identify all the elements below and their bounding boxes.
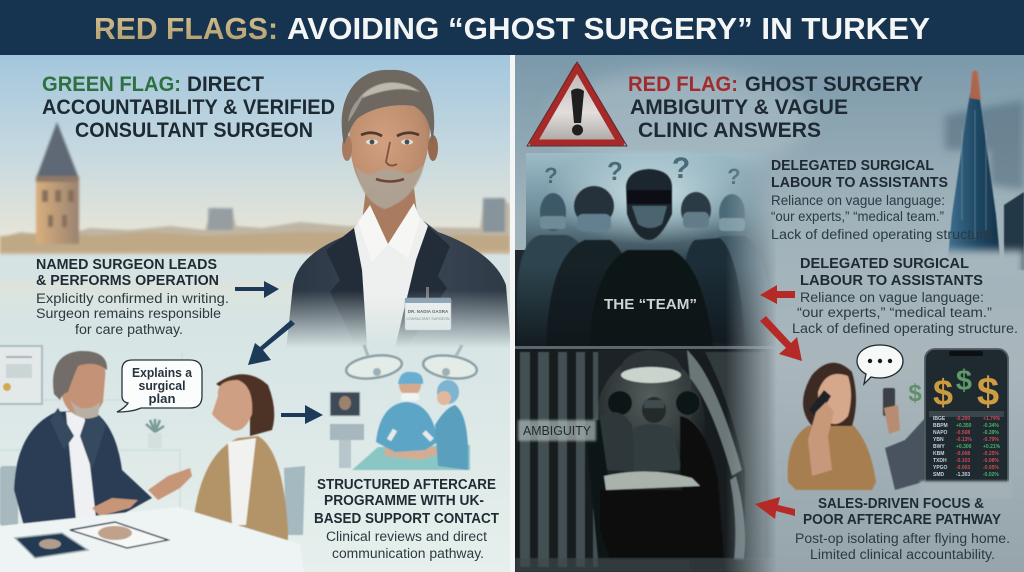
illustration: the team (515, 153, 774, 346)
arrow: to operating theatre (281, 405, 323, 424)
illustration: trading phone: -0.003 (956, 465, 970, 471)
text: delegated labour 1: LABOUR TO ASSISTANTS (771, 175, 948, 191)
doctor figure (14, 351, 192, 526)
skyline: Istanbul (0, 122, 510, 280)
text: structured aftercare (314, 477, 499, 561)
text: delegated labour 2 (792, 256, 1018, 336)
heading: green flag: CONSULTANT SURGEON (75, 119, 313, 142)
illustration: trading phone: -0.103 (956, 458, 970, 464)
illustration: trading phone: -0.08% (983, 458, 999, 464)
title: RED FLAGS: (94, 11, 278, 46)
heading: green flag: DIRECT (187, 73, 264, 96)
table with tablets (0, 507, 304, 572)
illustration: trading phone: SMD (933, 472, 944, 478)
illustration: trading phone: +0.300 (956, 444, 972, 450)
text: named surgeon: NAMED SURGEON LEADS (36, 257, 217, 273)
text: delegated labour 1: Lack of defined operating structure. (771, 227, 996, 242)
text: delegated labour 2: Reliance on vague language: (800, 290, 984, 305)
arrow: to the team (760, 285, 795, 304)
panel: green flag (0, 55, 512, 572)
illustration: operating theatre (330, 345, 478, 470)
text: sales-driven focus: Limited clinical accountability. (810, 547, 995, 562)
text: delegated labour 2: “our experts,” “medical team.” (797, 305, 992, 320)
patient figure (180, 374, 305, 545)
title: AVOIDING “GHOST SURGERY” IN TURKEY (287, 11, 930, 46)
illustration: trading phone: -0.39% (983, 430, 999, 436)
illustration: trading phone: -0.79% (983, 437, 999, 443)
illustration: trading phone: -0.02% (983, 472, 999, 478)
illustration: trading phone: -0.34% (983, 423, 999, 429)
text: structured aftercare: STRUCTURED AFTERCARE (317, 477, 496, 493)
icons: question marks: ? (672, 152, 690, 185)
icons: question marks (545, 157, 740, 184)
panel: red flag (515, 55, 1024, 572)
illustration: trading phone: +0.350 (956, 423, 972, 429)
illustration: trading phone: TXDH (933, 458, 947, 464)
illustration: ambiguity operating room (515, 346, 780, 572)
heading: green flag: GREEN FLAG: (42, 73, 181, 96)
illustration: consultation (0, 346, 305, 572)
portrait: named surgeon (285, 70, 512, 360)
text: delegated labour 2: LABOUR TO ASSISTANTS (800, 273, 983, 289)
illustration: trading phone: $ (977, 370, 999, 414)
illustration: trading phone: -0.25% (983, 451, 999, 457)
text: named surgeon: Surgeon remains responsible (36, 306, 221, 321)
callout: explains a surgical plan: surgical (138, 379, 186, 393)
heading: red flag: GHOST SURGERY (745, 73, 923, 96)
heading: red flag: RED FLAG: (628, 73, 738, 96)
text: named surgeon: Explicitly confirmed in writing. (36, 291, 229, 306)
illustration: trading phone: +0.21% (983, 444, 1001, 450)
heading: red flag (628, 73, 923, 142)
icon: the Shard tower (930, 70, 1024, 278)
icon: warning triangle (527, 62, 627, 146)
text: delegated labour 2: DELEGATED SURGICAL (800, 256, 969, 272)
text: sales-driven focus: SALES-DRIVEN FOCUS & (818, 496, 984, 512)
staff badge (405, 287, 451, 330)
callout: ellipsis bubble (857, 345, 903, 384)
callout: explains a surgical plan (117, 360, 202, 412)
text: named surgeon: for care pathway. (75, 322, 183, 337)
text: structured aftercare: communication pathway. (332, 546, 484, 561)
illustration: trading phone: BWY (933, 444, 945, 450)
illustration: anxious patient on the phone (788, 363, 876, 490)
heading: green flag: ACCOUNTABILITY & VERIFIED (42, 96, 335, 119)
text: delegated labour 1 (771, 158, 996, 242)
illustration: trading phone: -0.508 (956, 430, 970, 436)
illustration: trading phone: -0.13% (956, 437, 972, 443)
label: ambiguity (518, 420, 596, 441)
text: structured aftercare: Clinical reviews and direct (326, 529, 487, 544)
text: named surgeon (36, 257, 229, 337)
illustration: trading phone: +1.74% (983, 416, 1001, 422)
text: structured aftercare: BASED SUPPORT CONTACT (314, 511, 499, 527)
text: delegated labour 1: Reliance on vague language: (771, 193, 945, 208)
text: delegated labour 1: “our experts,” “medical team.” (771, 209, 944, 224)
icon: dollar signs: $ (908, 380, 922, 407)
illustration: trading phone: YPGO (933, 465, 948, 471)
illustration: trading phone: YBN (933, 437, 944, 443)
label: the team: THE “TEAM” (604, 296, 697, 313)
icon: dollar signs: $ (910, 353, 922, 375)
icons: question marks: ? (727, 164, 741, 189)
icon: dollar signs (908, 353, 922, 407)
illustration: trading phone: NAPO (933, 430, 948, 436)
illustration: trading phone: -0.008 (956, 451, 970, 457)
dark illustrations block (515, 145, 780, 572)
divider (510, 55, 515, 572)
heading: green flag (42, 73, 335, 142)
heading: red flag: AMBIGUITY & VAGUE (630, 96, 848, 119)
callout: explains a surgical plan: plan (148, 392, 176, 406)
arrow: to consultation (248, 320, 295, 365)
illustration: trading phone: IBGE (933, 416, 946, 422)
text: sales-driven focus (795, 496, 1010, 562)
icons: question marks: ? (607, 156, 623, 186)
illustration: trading phone: BBPM (933, 423, 948, 429)
text: structured aftercare: PROGRAMME WITH UK- (324, 493, 484, 509)
arrow: to ambiguity room (755, 497, 795, 519)
icons: question marks: ? (544, 163, 558, 188)
illustration: trading phone: KBM (933, 451, 944, 457)
illustration: trading phone: -0.05% (983, 465, 999, 471)
heading: red flag: CLINIC ANSWERS (638, 119, 821, 142)
illustration: trading phone: $ (956, 365, 972, 397)
header band (0, 0, 1024, 55)
illustration: hand with phone (883, 388, 930, 490)
arrow: to surgeon (235, 281, 279, 298)
staff badge: CONSULTANT SURGEON (407, 317, 450, 321)
text: delegated labour 2: Lack of defined operating structure. (792, 321, 1018, 336)
plant (146, 419, 164, 448)
text: named surgeon: & PERFORMS OPERATION (36, 273, 219, 289)
arrow: to woman on phone (760, 316, 802, 361)
callout: explains a surgical plan: Explains a (132, 366, 193, 380)
text: delegated labour 1: DELEGATED SURGICAL (771, 158, 934, 174)
icon: Galata tower (36, 122, 79, 244)
text: sales-driven focus: POOR AFTERCARE PATHWAY (803, 512, 1001, 528)
staff badge: DR. NADIA GASRA (408, 309, 449, 314)
illustration: trading phone: -1.303 (956, 472, 970, 478)
illustration: trading phone (920, 349, 1012, 498)
certificate (0, 346, 42, 404)
illustration: trading phone: $ (933, 372, 953, 413)
illustration: trading phone: -0.200 (956, 416, 970, 422)
text: sales-driven focus: Post-op isolating after flying home. (795, 531, 1010, 546)
label: ambiguity: AMBIGUITY (523, 423, 591, 438)
